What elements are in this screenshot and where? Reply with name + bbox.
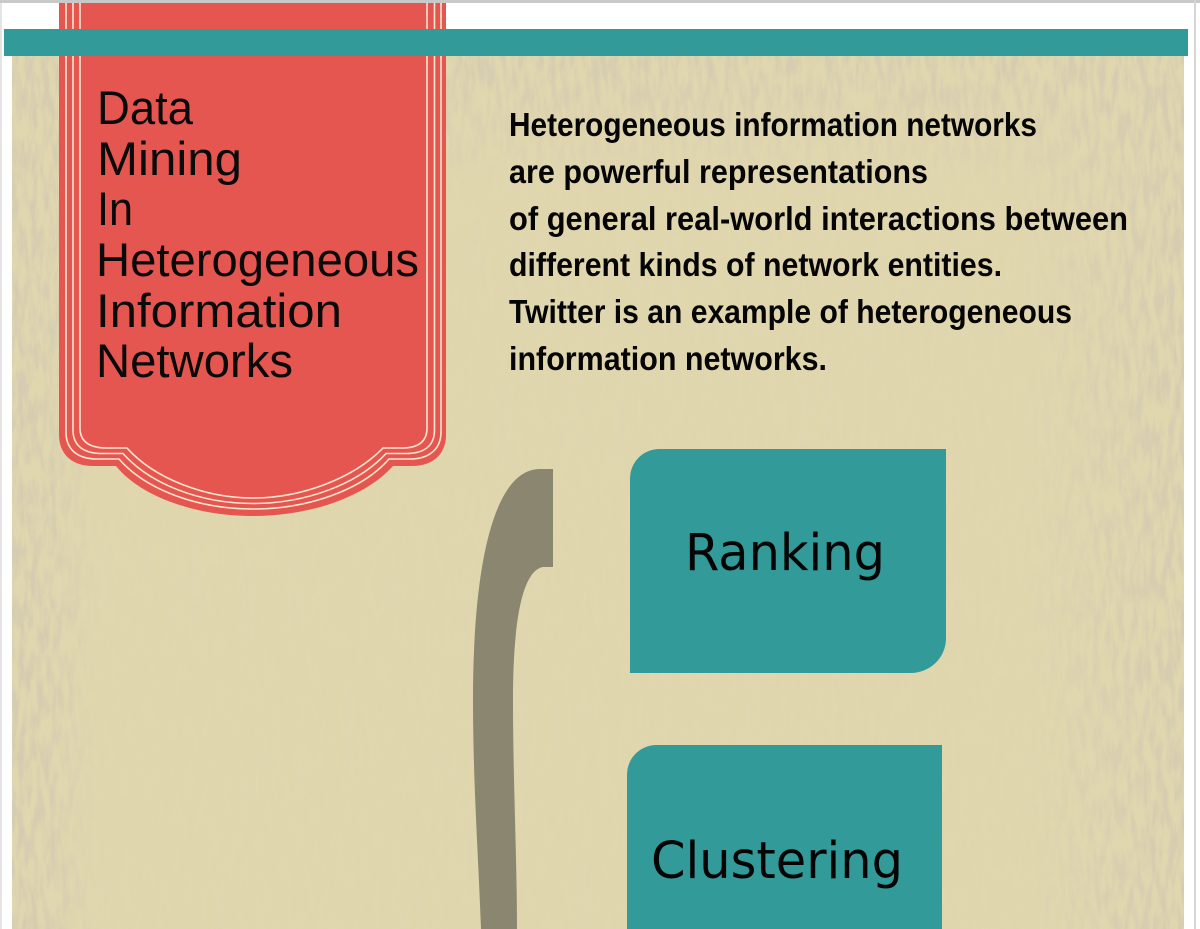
description text: Twitter is an example of heterogeneous <box>509 293 1072 330</box>
teal header bar <box>4 29 1188 56</box>
description text: are powerful representations <box>509 153 928 190</box>
description text: Heterogeneous information networks <box>509 106 1037 143</box>
red title banner <box>59 3 446 516</box>
banner title: In <box>97 182 133 235</box>
ranking box: Ranking <box>685 524 885 583</box>
clustering box <box>627 745 942 929</box>
banner title: Heterogeneous <box>96 233 419 286</box>
ranking box <box>630 449 946 673</box>
banner title: Information <box>96 284 342 337</box>
description text: different kinds of network entities. <box>509 246 1002 283</box>
banner title: Networks <box>96 334 293 387</box>
banner inset lines <box>66 3 441 509</box>
banner title: Mining <box>97 132 242 185</box>
description text: information networks. <box>509 340 827 377</box>
description text <box>509 106 1128 377</box>
curved gray connector <box>473 469 553 929</box>
clustering box: Clustering <box>651 832 903 891</box>
description text: of general real-world interactions between <box>509 200 1128 237</box>
banner title: Data <box>97 81 194 134</box>
banner title <box>96 81 419 387</box>
